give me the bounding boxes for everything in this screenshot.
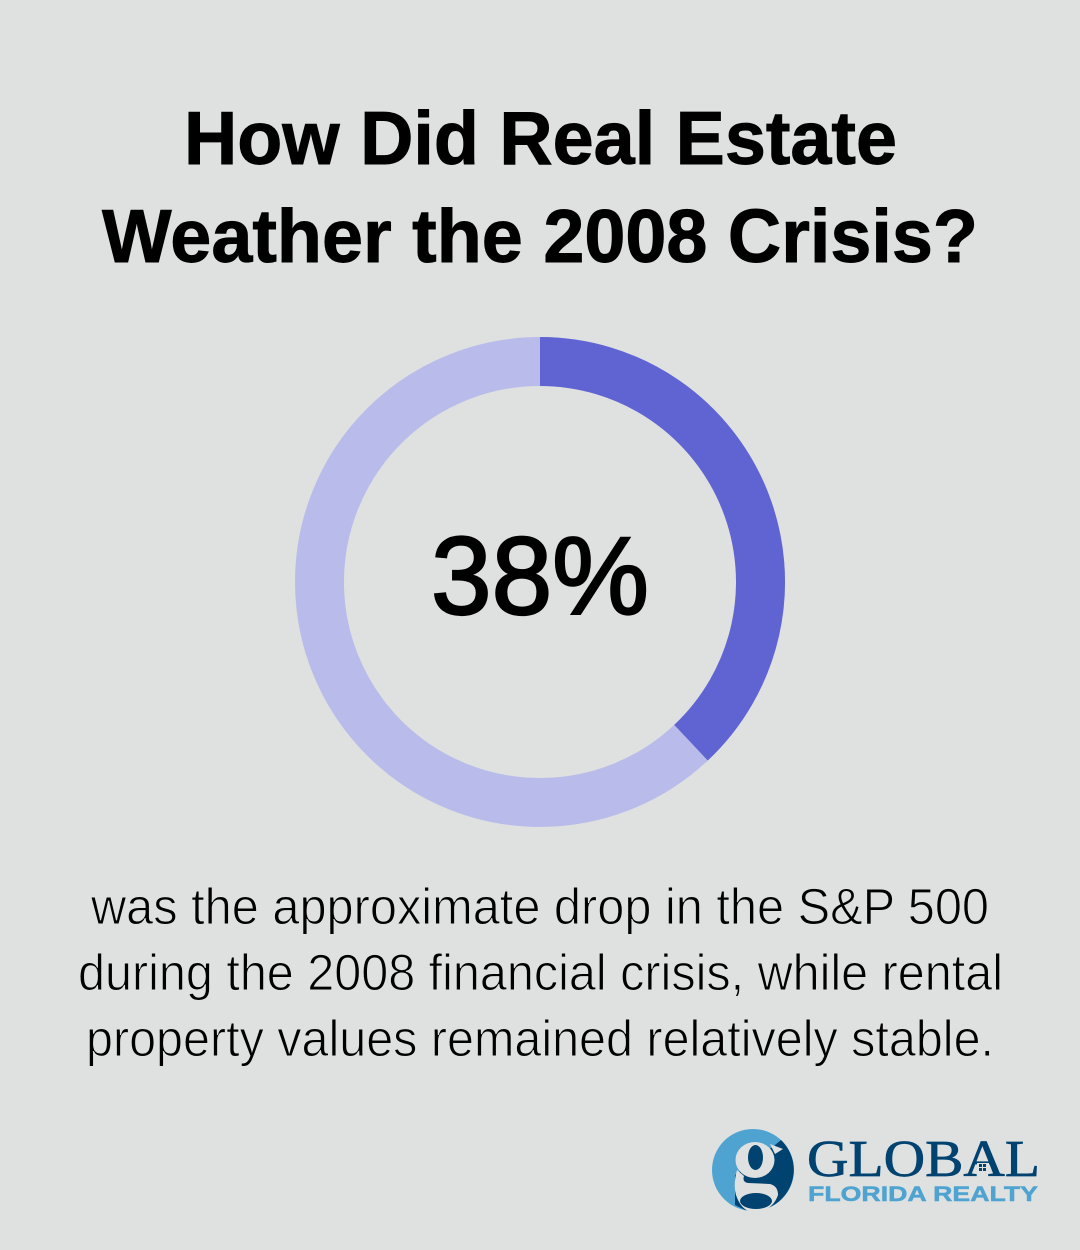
title: Weather the 2008 Crisis? (102, 194, 978, 278)
logo: Global Florida Realty (712, 1129, 1040, 1211)
description text: was the approximate drop in the S&P 500 (90, 878, 989, 935)
logo house windows (977, 1163, 989, 1172)
donut chart: 38% (320, 362, 761, 802)
logo wordmark: FLORIDA REALTY: FLORIDA REALTY (808, 1182, 1038, 1206)
title (102, 96, 978, 278)
description text: property values remained relatively stable. (86, 1010, 994, 1067)
big percentage: 38% (431, 515, 649, 638)
description text: during the 2008 financial crisis, while rental (78, 944, 1003, 1001)
logo wordmark: GLOBAL: GLOBAL (807, 1131, 1040, 1188)
description text (78, 878, 1003, 1067)
title: How Did Real Estate (184, 96, 897, 180)
logo icon: g in circle (712, 1129, 794, 1211)
